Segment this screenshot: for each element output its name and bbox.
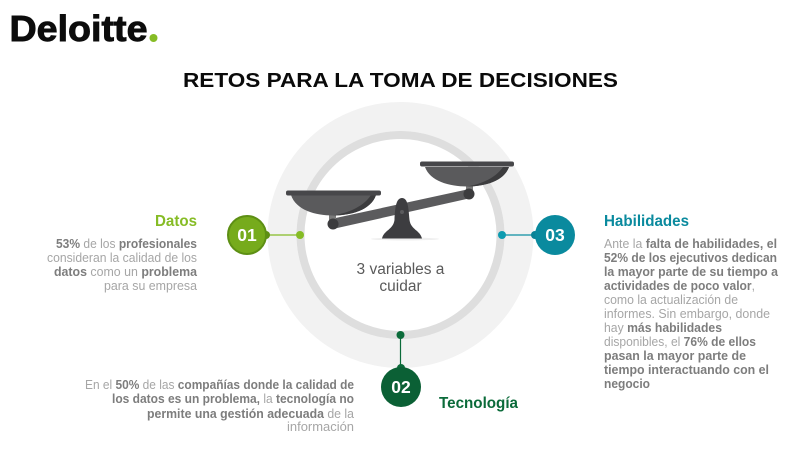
panel: Habilidades: Ante la falta de habilidades, el xyxy=(604,236,777,251)
marker 02 xyxy=(381,331,421,407)
panel: Tecnología: información xyxy=(287,419,354,434)
panel: Habilidades: pasan la mayor parte de xyxy=(604,348,746,363)
marker 01 xyxy=(228,216,304,254)
panel: Habilidades: informes. Sin embargo, donde xyxy=(604,306,770,321)
marker 02: 02 xyxy=(391,377,411,397)
panel: Habilidades: tiempo interactuando con el xyxy=(604,362,769,377)
logo: Deloitte: Deloitte xyxy=(10,8,148,49)
icon: balance scale xyxy=(286,162,514,240)
center label: 3 variables a xyxy=(357,261,445,278)
panel: Tecnología: Tecnología xyxy=(439,395,518,412)
panel: Habilidades: 52% de los ejecutivos dedican xyxy=(604,250,777,265)
panel: Habilidades: negocio xyxy=(604,376,650,391)
marker 03: 03 xyxy=(545,225,565,245)
panel: Habilidades: disponibles, el 76% de ellos xyxy=(604,334,756,349)
center label xyxy=(357,261,445,295)
panel: Habilidades: Habilidades xyxy=(604,213,689,230)
marker 03 xyxy=(498,215,575,255)
panel: Habilidades xyxy=(604,213,779,391)
panel: Datos: para su empresa xyxy=(104,278,198,293)
panel: Tecnología: los datos es un problema, la tecnología no xyxy=(112,391,354,406)
panel: Datos: consideran la calidad de los xyxy=(47,250,197,265)
panel: Habilidades: la mayor parte de su tiempo a xyxy=(604,264,779,279)
panel: Habilidades: hay más habilidades xyxy=(604,320,722,335)
title: RETOS PARA LA TOMA DE DECISIONES xyxy=(183,69,618,92)
panel: Habilidades: actividades de poco valor, xyxy=(604,278,755,293)
panel: Tecnología: En el 50% de las compañías donde la calidad de xyxy=(85,377,354,392)
marker 01: 01 xyxy=(237,225,257,245)
panel: Habilidades: como la actualización de xyxy=(604,292,738,307)
panel: Datos: 53% de los profesionales xyxy=(56,236,197,251)
panel: Datos: datos como un problema xyxy=(54,264,198,279)
panel: Tecnología: permite una gestión adecuada de la xyxy=(147,406,355,421)
panel: Datos: Datos xyxy=(155,213,197,230)
panel: Tecnología xyxy=(85,377,518,434)
central ring xyxy=(282,116,519,354)
center label: cuidar xyxy=(379,278,422,295)
panel: Datos xyxy=(47,213,198,293)
